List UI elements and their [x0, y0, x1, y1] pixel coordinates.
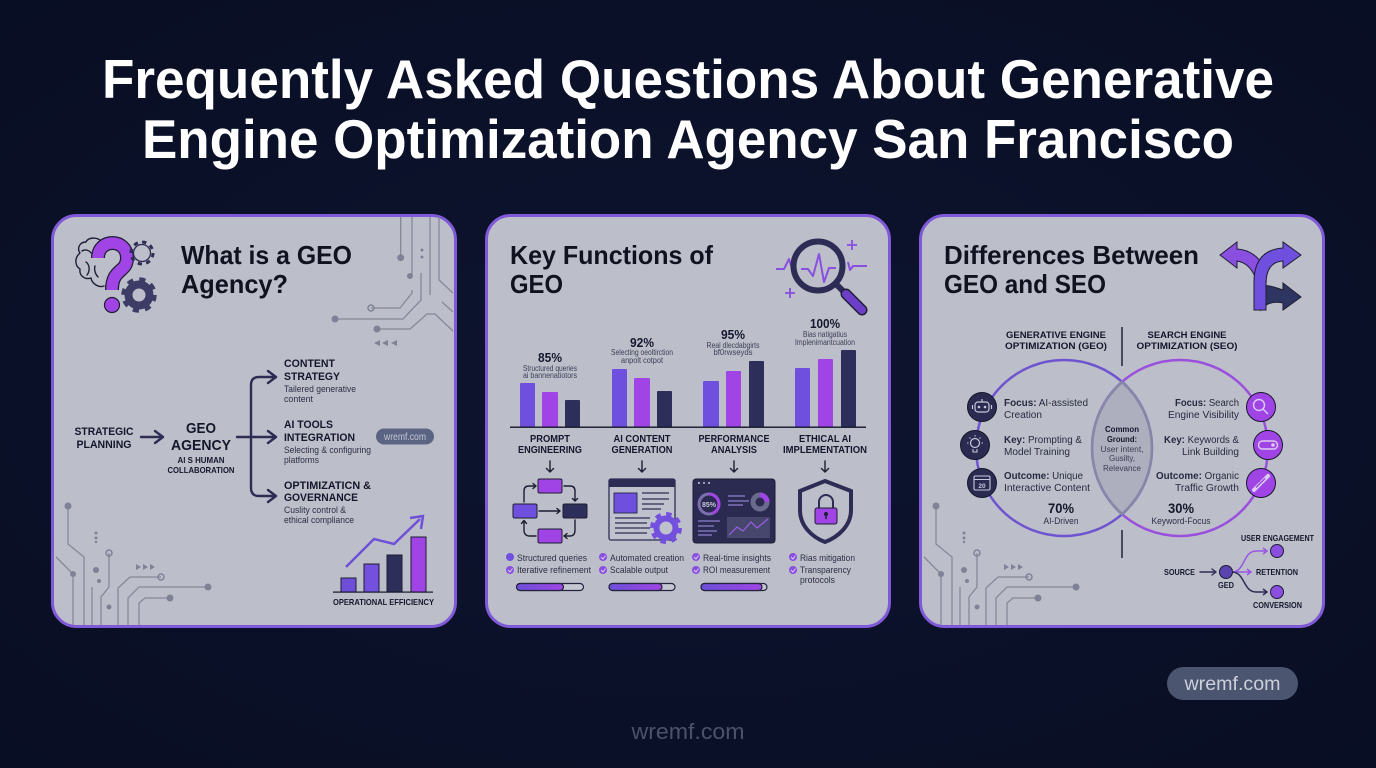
bar chart: function scores: Selecting oeoltirction — [611, 348, 673, 357]
text: GEO agency: GEO — [186, 420, 216, 437]
icon: search — [1246, 392, 1276, 422]
text: SEO focus: Focus: Search — [1175, 398, 1239, 409]
text: strategic planning: STRATEGIC — [74, 426, 134, 438]
flow diagram: source to outcomes — [1164, 533, 1315, 610]
text: common ground: Ground: — [1107, 435, 1137, 444]
panel: Key Functions of GEO — [486, 216, 890, 626]
text: SEO focus — [1168, 398, 1239, 421]
icon: content browser with gear — [609, 479, 680, 542]
list: prompt engineering: Iterative refinement — [517, 565, 591, 575]
text: common ground: Common — [1105, 425, 1139, 434]
heading: venn column titles: OPTIMIZATION (SEO) — [1136, 341, 1238, 352]
list: prompt engineering — [506, 553, 591, 575]
text: SEO key: Link Building — [1182, 447, 1239, 458]
title: Engine Optimization Agency San Francisco — [142, 108, 1234, 170]
text: GEO key — [1004, 435, 1082, 458]
title — [102, 48, 1274, 170]
headings: function columns: ENGINEERING — [518, 444, 582, 456]
venn diagram — [960, 360, 1282, 536]
stat: 70 percent AI-driven — [1044, 501, 1078, 526]
stat: 70 percent AI-driven: AI-Driven — [1044, 516, 1078, 526]
headings: function columns: IMPLEMENTATION — [783, 444, 867, 456]
list: ethical AI implementation — [789, 553, 855, 585]
text: content strategy: CONTENT — [284, 358, 335, 370]
headings: function columns: GENERATION — [612, 444, 672, 456]
text: GEO agency — [168, 420, 234, 475]
text: GEO outcome: Interactive Content — [1004, 483, 1090, 494]
text: optimization and governance — [284, 480, 371, 525]
heading: Key Functions of GEO — [510, 240, 713, 299]
icon: diverging arrows — [1220, 242, 1301, 310]
icon: brain, question mark and gears — [76, 238, 154, 312]
icon: shield with padlock — [800, 481, 851, 542]
heading: Differences Between GEO and SEO — [944, 240, 1199, 299]
icon: robot — [968, 392, 996, 422]
text: AI tools integration: platforms — [284, 455, 319, 465]
list: AI content generation: Scalable output — [610, 565, 668, 575]
chart: operational efficiency — [333, 516, 434, 607]
text: common ground: Relevance — [1103, 464, 1142, 473]
heading: Differences Between GEO and SEO: GEO and SEO — [944, 269, 1106, 299]
icon: interactive calendar — [968, 468, 996, 498]
bar chart: function scores: Structured queries — [523, 364, 577, 373]
text: GEO focus — [1004, 398, 1088, 421]
text: GEO agency: AGENCY — [171, 437, 231, 454]
heading: What is a GEO Agency: Agency? — [181, 269, 288, 299]
chart: operational efficiency: OPERATIONAL EFFICIENCY — [333, 597, 434, 607]
text: GEO agency: AI S HUMAN — [178, 455, 224, 465]
icon: prompt cycle — [513, 479, 587, 543]
icon: toggle keyword — [1254, 430, 1282, 460]
text: AI tools integration: Selecting & configuring — [284, 445, 371, 455]
text: SEO key — [1164, 435, 1239, 458]
heading: venn column titles: OPTIMIZATION (GEO) — [1005, 341, 1107, 352]
bar chart: function scores: 100% — [810, 316, 840, 331]
headings: function columns: ANALYSIS — [711, 444, 757, 456]
flow diagram: source to outcomes: CONVERSION — [1253, 600, 1302, 610]
decoration: circuit bottom left — [56, 502, 212, 625]
arrows: columns down — [546, 461, 828, 472]
bar chart: function scores: 85% — [538, 350, 562, 365]
text: content strategy — [284, 358, 356, 404]
title: Frequently Asked Questions About Generative — [102, 48, 1274, 110]
text: SEO focus: Engine Visibility — [1168, 410, 1239, 421]
heading: venn column titles — [1005, 327, 1238, 558]
text: SEO outcome: Outcome: Organic — [1156, 471, 1239, 482]
text: GEO outcome — [1004, 471, 1090, 494]
stat: 70 percent AI-driven: 70% — [1048, 501, 1074, 516]
bar chart: function scores: Real dlecdabgirts — [706, 341, 760, 350]
panel: What is a GEO Agency — [52, 216, 456, 626]
text: GEO key: Model Training — [1004, 447, 1070, 458]
text: AI tools integration: INTEGRATION — [284, 432, 355, 444]
text: SEO outcome — [1156, 471, 1239, 494]
flow diagram: source to outcomes: USER ENGAGEMENT — [1241, 533, 1315, 543]
text: strategic planning — [74, 426, 134, 451]
flow diagram: source to outcomes: SOURCE — [1164, 567, 1195, 577]
stat: 30 percent keyword focus — [1152, 501, 1211, 526]
heading: venn column titles: GENERATIVE ENGINE — [1006, 330, 1106, 341]
panel: Differences Between GEO and SEO — [920, 216, 1324, 626]
footer watermark: wremf.com — [630, 719, 744, 744]
list: AI content generation — [599, 553, 684, 575]
heading: What is a GEO Agency — [181, 240, 352, 299]
heading: What is a GEO Agency: What is a GEO — [181, 240, 352, 270]
progress bars — [516, 584, 767, 590]
badge: wremf.com bottom right: wremf.com — [1183, 674, 1280, 695]
text: common ground — [1100, 425, 1144, 473]
list: ethical AI implementation: protocols — [800, 575, 835, 585]
icon: analytics dashboard — [693, 479, 775, 543]
text: AI tools integration — [284, 419, 371, 465]
badge: wremf.com: wremf.com — [383, 432, 426, 443]
bar chart: function scores: 95% — [721, 327, 745, 342]
icon: analytics dashboard: 85% — [702, 502, 717, 509]
stat: 30 percent keyword focus: Keyword-Focus — [1152, 516, 1211, 526]
bar chart: function scores: Implenimantcuation — [795, 338, 855, 347]
icon: interactive calendar: 20 — [978, 483, 986, 490]
decoration: circuit top right — [332, 217, 453, 346]
arrows: agency branches — [237, 371, 276, 502]
stat: 30 percent keyword focus: 30% — [1168, 501, 1194, 516]
headings: function columns: AI CONTENT — [614, 433, 671, 445]
text: GEO focus: Focus: AI-assisted — [1004, 398, 1088, 409]
list: ethical AI implementation: Transparency — [800, 565, 851, 575]
text: common ground: Gusilty, — [1109, 454, 1135, 463]
text: GEO focus: Creation — [1004, 410, 1042, 421]
list: AI content generation: Automated creation — [610, 553, 684, 563]
text: strategic planning: PLANNING — [76, 439, 132, 451]
badge: wremf.com bottom right — [1167, 667, 1298, 700]
list: prompt engineering: Structured queries — [517, 553, 587, 563]
arrow: planning to agency — [141, 431, 163, 443]
text: GEO agency: COLLABORATION — [168, 465, 234, 475]
bar chart: function scores: 92% — [630, 335, 654, 350]
text: optimization and governance: Cuslity control & — [284, 505, 346, 515]
text: AI tools integration: AI TOOLS — [284, 419, 333, 431]
badge: wremf.com — [376, 428, 434, 444]
text: common ground: User intent, — [1100, 445, 1144, 454]
list: performance analysis: ROI measurement — [703, 565, 770, 575]
text: GEO outcome: Outcome: Unique — [1004, 471, 1083, 482]
text: optimization and governance: GOVERNANCE — [284, 492, 358, 504]
bar chart: function scores: bf0rwseyds — [714, 348, 752, 357]
bar chart: function scores: Bias natigatius — [803, 330, 847, 339]
text: optimization and governance: OPTIMIZATICN & — [284, 480, 371, 492]
text: SEO outcome: Traffic Growth — [1175, 483, 1239, 494]
decoration: circuit bottom left — [924, 502, 1080, 625]
icon: magnifier with waveform — [776, 240, 867, 310]
headings: function columns: ETHICAL AI — [799, 433, 851, 445]
list: performance analysis: Real-time insights — [703, 553, 771, 563]
text: content strategy: STRATEGY — [284, 371, 341, 383]
bar chart: function scores — [510, 316, 866, 428]
text: GEO key: Key: Prompting & — [1004, 435, 1082, 446]
bar chart: function scores: ai bannenatiotors — [523, 371, 577, 380]
headings: function columns: PROMPT — [530, 433, 571, 445]
heading: Differences Between GEO and SEO: Differences Between — [944, 240, 1199, 270]
heading: Key Functions of GEO: GEO — [510, 269, 563, 299]
text: SEO key: Key: Keywords & — [1164, 435, 1239, 446]
flow diagram: source to outcomes: RETENTION — [1256, 567, 1298, 577]
text: content strategy: Tailered generative — [284, 384, 356, 394]
icon: light bulb — [960, 430, 990, 460]
heading: Key Functions of GEO: Key Functions of — [510, 240, 713, 270]
text: optimization and governance: ethical compliance — [284, 515, 354, 525]
text: content strategy: content — [284, 394, 313, 404]
bar chart: function scores: anpolt cotpot — [621, 356, 664, 365]
flow diagram: source to outcomes: GED — [1218, 580, 1234, 590]
list: ethical AI implementation: Rias mitigation — [800, 553, 855, 563]
icon: chain link — [1246, 468, 1276, 498]
headings: function columns: PERFORMANCE — [698, 433, 770, 445]
heading: venn column titles: SEARCH ENGINE — [1148, 330, 1226, 341]
headings: function columns — [518, 433, 867, 456]
list: performance analysis — [692, 553, 771, 575]
